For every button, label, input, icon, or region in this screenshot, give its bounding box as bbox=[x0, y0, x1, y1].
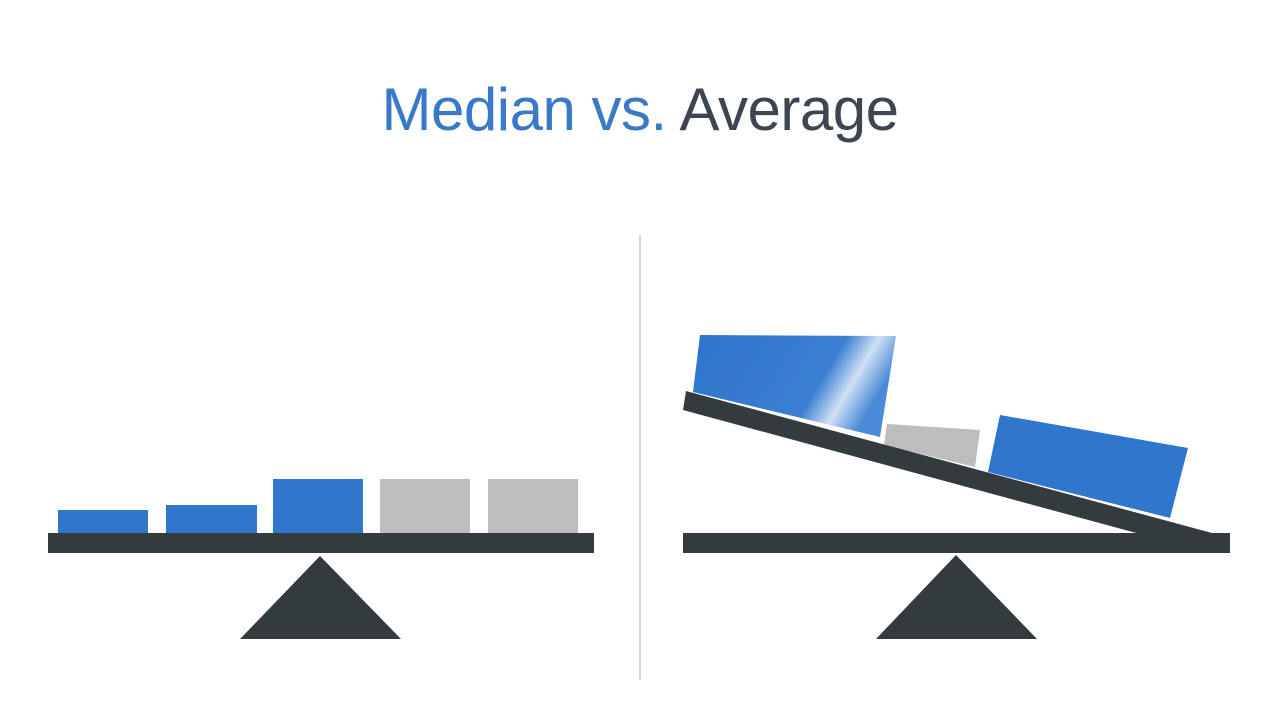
average blocks bbox=[693, 335, 1188, 518]
average plank bbox=[683, 533, 1230, 553]
average fulcrum bbox=[876, 555, 1037, 639]
tilted plank bbox=[683, 391, 1212, 534]
median blocks bbox=[58, 479, 578, 533]
panel: average tilted scale bbox=[683, 335, 1230, 639]
divider bbox=[639, 235, 641, 680]
title: Median vs. Average bbox=[382, 76, 898, 143]
panel: median balanced scale bbox=[48, 479, 594, 639]
median fulcrum bbox=[240, 556, 401, 639]
median plank bbox=[48, 533, 594, 553]
